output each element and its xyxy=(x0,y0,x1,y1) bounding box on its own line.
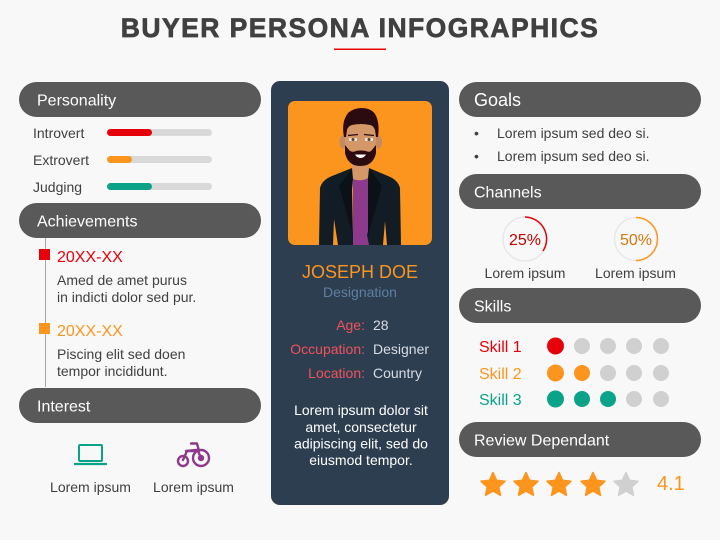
bar: extrovert: Extrovert xyxy=(33,152,89,168)
description: Lorem ipsum dolor sit xyxy=(294,402,428,418)
timeline item 1: in indicti dolor sed pur. xyxy=(57,289,196,305)
face xyxy=(345,122,376,166)
bar: judging: Judging xyxy=(33,179,82,195)
icon: bicycle xyxy=(178,444,209,466)
detail: occupation: Designer xyxy=(373,341,429,357)
bar: judging xyxy=(33,179,212,195)
heading: goals: Goals xyxy=(474,90,521,110)
detail: age: Age: xyxy=(336,317,365,333)
heading: personality xyxy=(19,82,261,117)
timeline item 2: Piscing elit sed doen xyxy=(57,346,185,362)
skill 3: Skill 3 xyxy=(479,392,522,409)
panel: achievements xyxy=(19,203,261,387)
bar: introvert xyxy=(33,125,212,141)
icon: laptop xyxy=(74,445,107,464)
timeline item 2 xyxy=(39,323,185,379)
timeline item 2: tempor incididunt. xyxy=(57,363,168,379)
rating stars xyxy=(481,472,638,495)
donut: 50%: 50% xyxy=(620,232,652,249)
skill 2: Skill 2 xyxy=(479,366,522,383)
detail: age xyxy=(336,317,389,333)
heading: goals xyxy=(459,82,701,117)
heading: achievements xyxy=(19,203,261,238)
skill 1: Skill 1 xyxy=(479,339,522,356)
jacket xyxy=(319,168,401,245)
name: JOSEPH DOE xyxy=(302,262,418,282)
panel: goals xyxy=(459,82,701,164)
goal 1: Lorem ipsum sed deo si. xyxy=(497,125,650,141)
panel: channels xyxy=(459,174,701,281)
timeline item 1: Amed de amet purus xyxy=(57,272,187,288)
panel: personality xyxy=(19,82,261,195)
bar: extrovert xyxy=(33,152,212,168)
heading: channels xyxy=(459,174,701,209)
label: channel 1: Lorem ipsum xyxy=(485,265,565,281)
heading: personality: Personality xyxy=(37,92,116,110)
hair xyxy=(343,108,379,137)
heading: interest: Interest xyxy=(37,398,91,416)
goal 1: • xyxy=(474,125,479,141)
detail: age: 28 xyxy=(373,317,389,333)
skill 2 xyxy=(479,364,669,383)
panel: profile card xyxy=(271,81,449,505)
heading: skills xyxy=(459,288,701,323)
beard xyxy=(345,145,376,166)
timeline item 2: 20XX-XX xyxy=(57,323,123,340)
description: eiusmod tempor. xyxy=(309,452,413,468)
detail: location: Country xyxy=(373,365,422,381)
panel: skills xyxy=(459,288,701,409)
timeline item 1: 20XX-XX xyxy=(57,249,123,266)
shirt xyxy=(353,178,369,245)
panel: interest xyxy=(19,388,261,495)
description: amet, consectetur xyxy=(305,419,417,435)
goal 2: Lorem ipsum sed deo si. xyxy=(497,148,650,164)
bar: introvert: Introvert xyxy=(33,125,84,141)
donut: 25% xyxy=(503,217,547,261)
designation: Designation xyxy=(323,284,397,300)
skill 3 xyxy=(479,390,669,409)
detail: location: Location: xyxy=(308,365,365,381)
rating value: 4.1 xyxy=(657,473,685,495)
heading: interest xyxy=(19,388,261,423)
neck xyxy=(343,158,379,190)
ears xyxy=(340,136,346,148)
goal 2: • xyxy=(474,148,479,164)
heading: achievements: Achievements xyxy=(37,214,138,230)
title: BUYER PERSONA INFOGRAPHICS xyxy=(121,13,599,43)
label: laptop: Lorem ipsum xyxy=(50,479,131,495)
heading: skills: Skills xyxy=(474,298,511,316)
description: adipiscing elit, sed do xyxy=(294,436,428,452)
skill 1 xyxy=(479,338,669,356)
label: bicycle: Lorem ipsum xyxy=(153,479,234,495)
detail: occupation: Occupation: xyxy=(290,341,365,357)
donut: 50% xyxy=(614,218,658,260)
label: channel 2: Lorem ipsum xyxy=(595,265,676,281)
detail: occupation xyxy=(290,341,429,357)
description xyxy=(294,402,428,468)
donut: 25%: 25% xyxy=(509,232,541,249)
panel: review xyxy=(459,422,701,495)
mouth xyxy=(355,154,366,158)
eyes and brows xyxy=(348,134,374,136)
heading: review xyxy=(459,422,701,457)
portrait xyxy=(288,101,432,245)
heading: channels: Channels xyxy=(474,184,542,202)
heading: review: Review Dependant xyxy=(474,432,610,450)
timeline item 1 xyxy=(39,249,196,305)
detail: location xyxy=(308,365,422,381)
